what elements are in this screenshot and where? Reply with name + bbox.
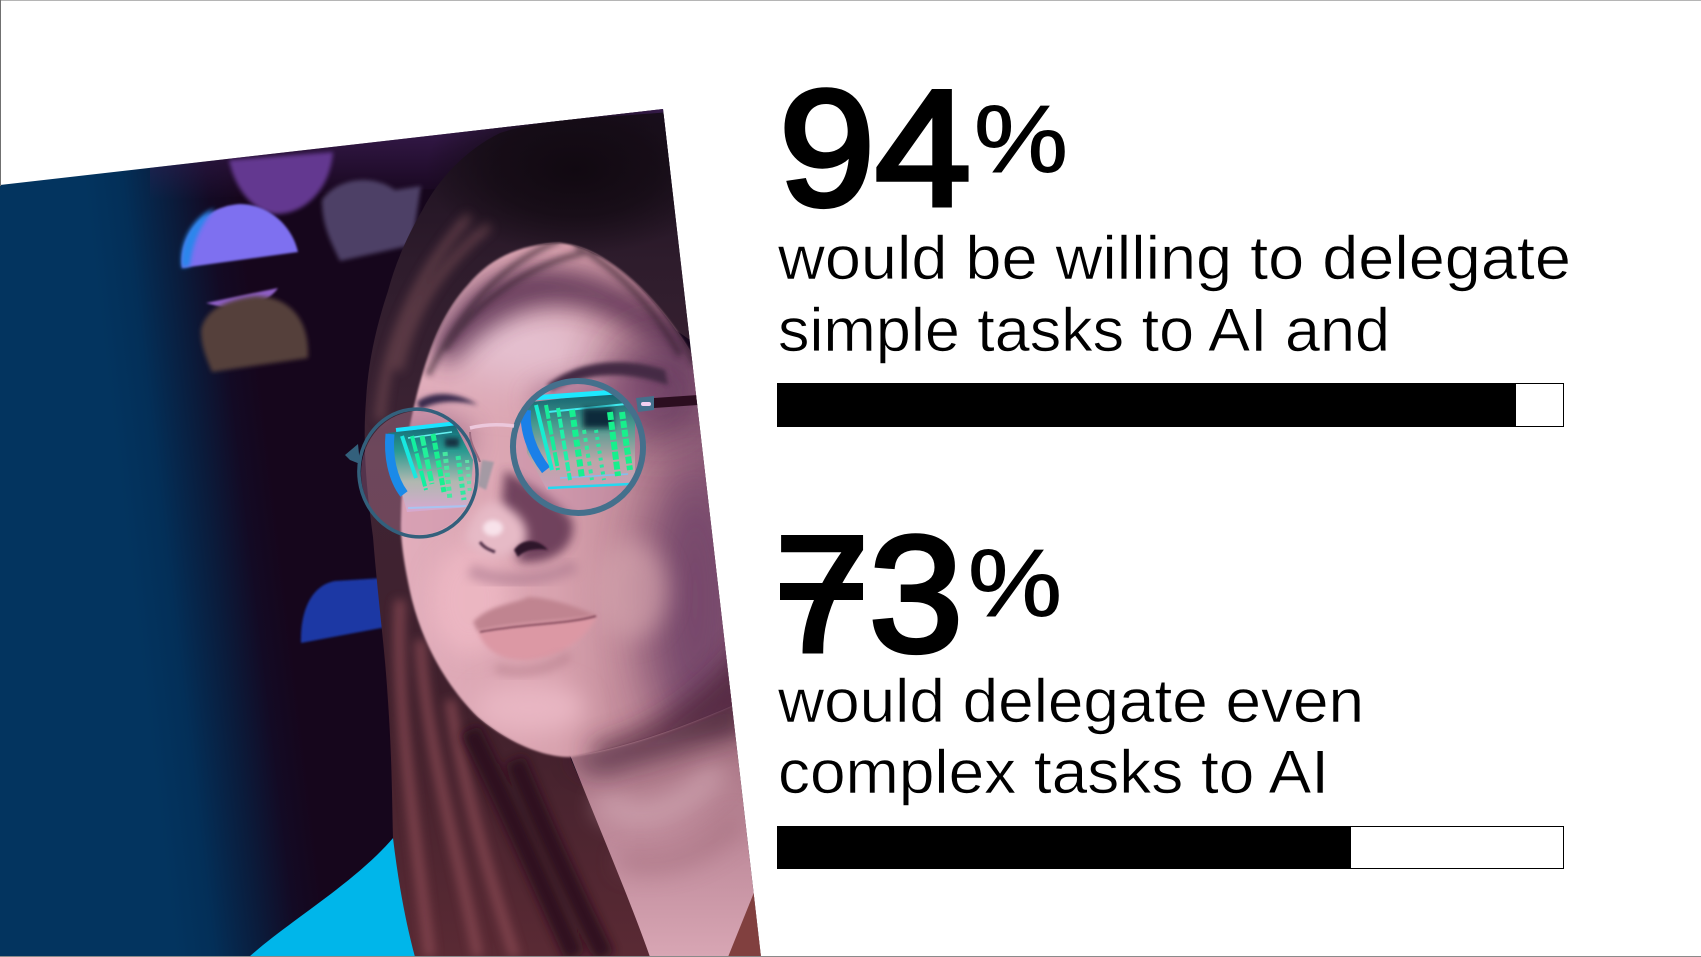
navy to dark purple backdrop: [0, 100, 770, 957]
left frame: [357, 407, 479, 539]
bokeh lights: [181, 152, 421, 643]
bridge: [470, 425, 514, 428]
nose pad: [478, 460, 494, 490]
progress bar 94 percent: [777, 383, 1564, 427]
big number 73: 73: [775, 502, 963, 686]
description text: complex tasks to AI: [778, 738, 1329, 806]
right-side hair wisps: [728, 893, 761, 956]
percent sign: %: [968, 530, 1062, 637]
glasses: [345, 371, 698, 545]
temple arm: [654, 395, 698, 408]
description text: simple tasks to AI and: [778, 296, 1390, 364]
right frame: [510, 378, 646, 516]
purple glow along top edge: [150, 109, 670, 186]
stat block: 73%: [775, 502, 1564, 869]
stat block: 94%: [777, 56, 1571, 427]
right hinge: [636, 396, 654, 412]
eye socket shadows: [410, 404, 482, 457]
hair: [364, 110, 690, 956]
big number 94: 94: [779, 56, 971, 240]
nose: [500, 470, 573, 562]
percent sign: %: [974, 86, 1068, 193]
description text: would delegate even: [777, 667, 1364, 735]
lips: [473, 597, 597, 632]
cheek and jaw shading: [645, 460, 745, 740]
photo: woman with glasses reflecting code: [0, 85, 775, 957]
hairline strands over forehead: [428, 240, 695, 375]
right lens reflection: [516, 384, 640, 508]
description text: [777, 667, 1364, 806]
cyan shirt: [249, 832, 420, 957]
progress bar 73 percent: [777, 826, 1564, 869]
left hinge: [345, 444, 359, 463]
eyebrows: [417, 394, 478, 410]
face: [400, 242, 732, 758]
description text: [777, 224, 1571, 364]
description text: would be willing to delegate: [777, 224, 1571, 292]
neck: [570, 690, 775, 957]
forehead shading: [445, 311, 605, 379]
left lens reflection: [358, 409, 478, 537]
